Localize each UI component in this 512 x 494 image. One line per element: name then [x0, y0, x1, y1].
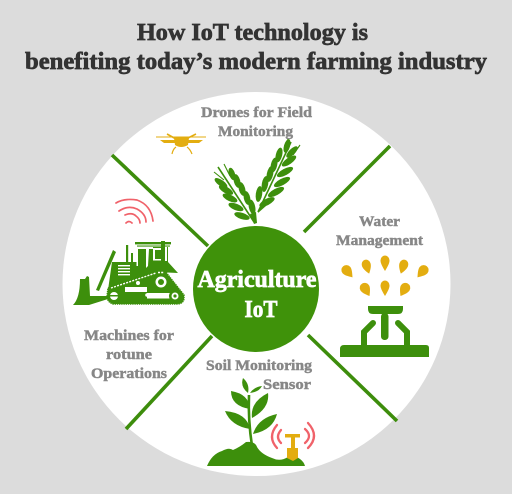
crawler track: [107, 271, 184, 304]
blade: [73, 276, 108, 305]
label: water management: Management: [336, 233, 423, 249]
label: machines: [84, 328, 174, 382]
label: drones: Drones for Field: [201, 105, 313, 121]
label: water management: Water: [359, 214, 400, 230]
vent and cab windows: [118, 247, 167, 275]
title: benefiting today’s modern farming industry: [25, 49, 487, 75]
left ear grains: [213, 167, 257, 224]
label: machines: Operations: [91, 366, 167, 382]
centre circle: Agriculture IoT: Agriculture: [198, 267, 317, 293]
icon: wifi signal: [116, 199, 153, 223]
right ear grains: [255, 138, 299, 213]
cab roof: [135, 242, 171, 244]
icon: drone: [156, 134, 206, 154]
quadrant divider lines: [112, 146, 397, 429]
title: How IoT technology is: [137, 20, 368, 46]
icon: bulldozer: [73, 241, 184, 305]
centre circle: Agriculture IoT: IoT: [244, 297, 278, 323]
icon: soil sensor: [272, 423, 314, 461]
icon: water droplets: [339, 256, 431, 299]
label: machines: Machines for: [84, 328, 174, 344]
body and cab: [108, 247, 178, 290]
label: drones: Monitoring: [218, 124, 293, 140]
icon: plant on soil: [207, 378, 305, 466]
label: water management: [336, 214, 423, 249]
label: soil monitoring: Sensor: [263, 377, 311, 393]
push arm: [96, 250, 116, 291]
icon: wheat: [213, 138, 300, 224]
label: machines: rotune: [106, 347, 152, 363]
label: drones: [201, 105, 313, 140]
title: [25, 20, 487, 75]
label: soil monitoring: Soil Monitoring: [206, 358, 313, 374]
centre circle: Agriculture IoT: [193, 226, 319, 352]
label: soil monitoring: [206, 358, 313, 393]
main white circle: [62, 92, 450, 476]
icon: sprinkler: [340, 306, 429, 357]
